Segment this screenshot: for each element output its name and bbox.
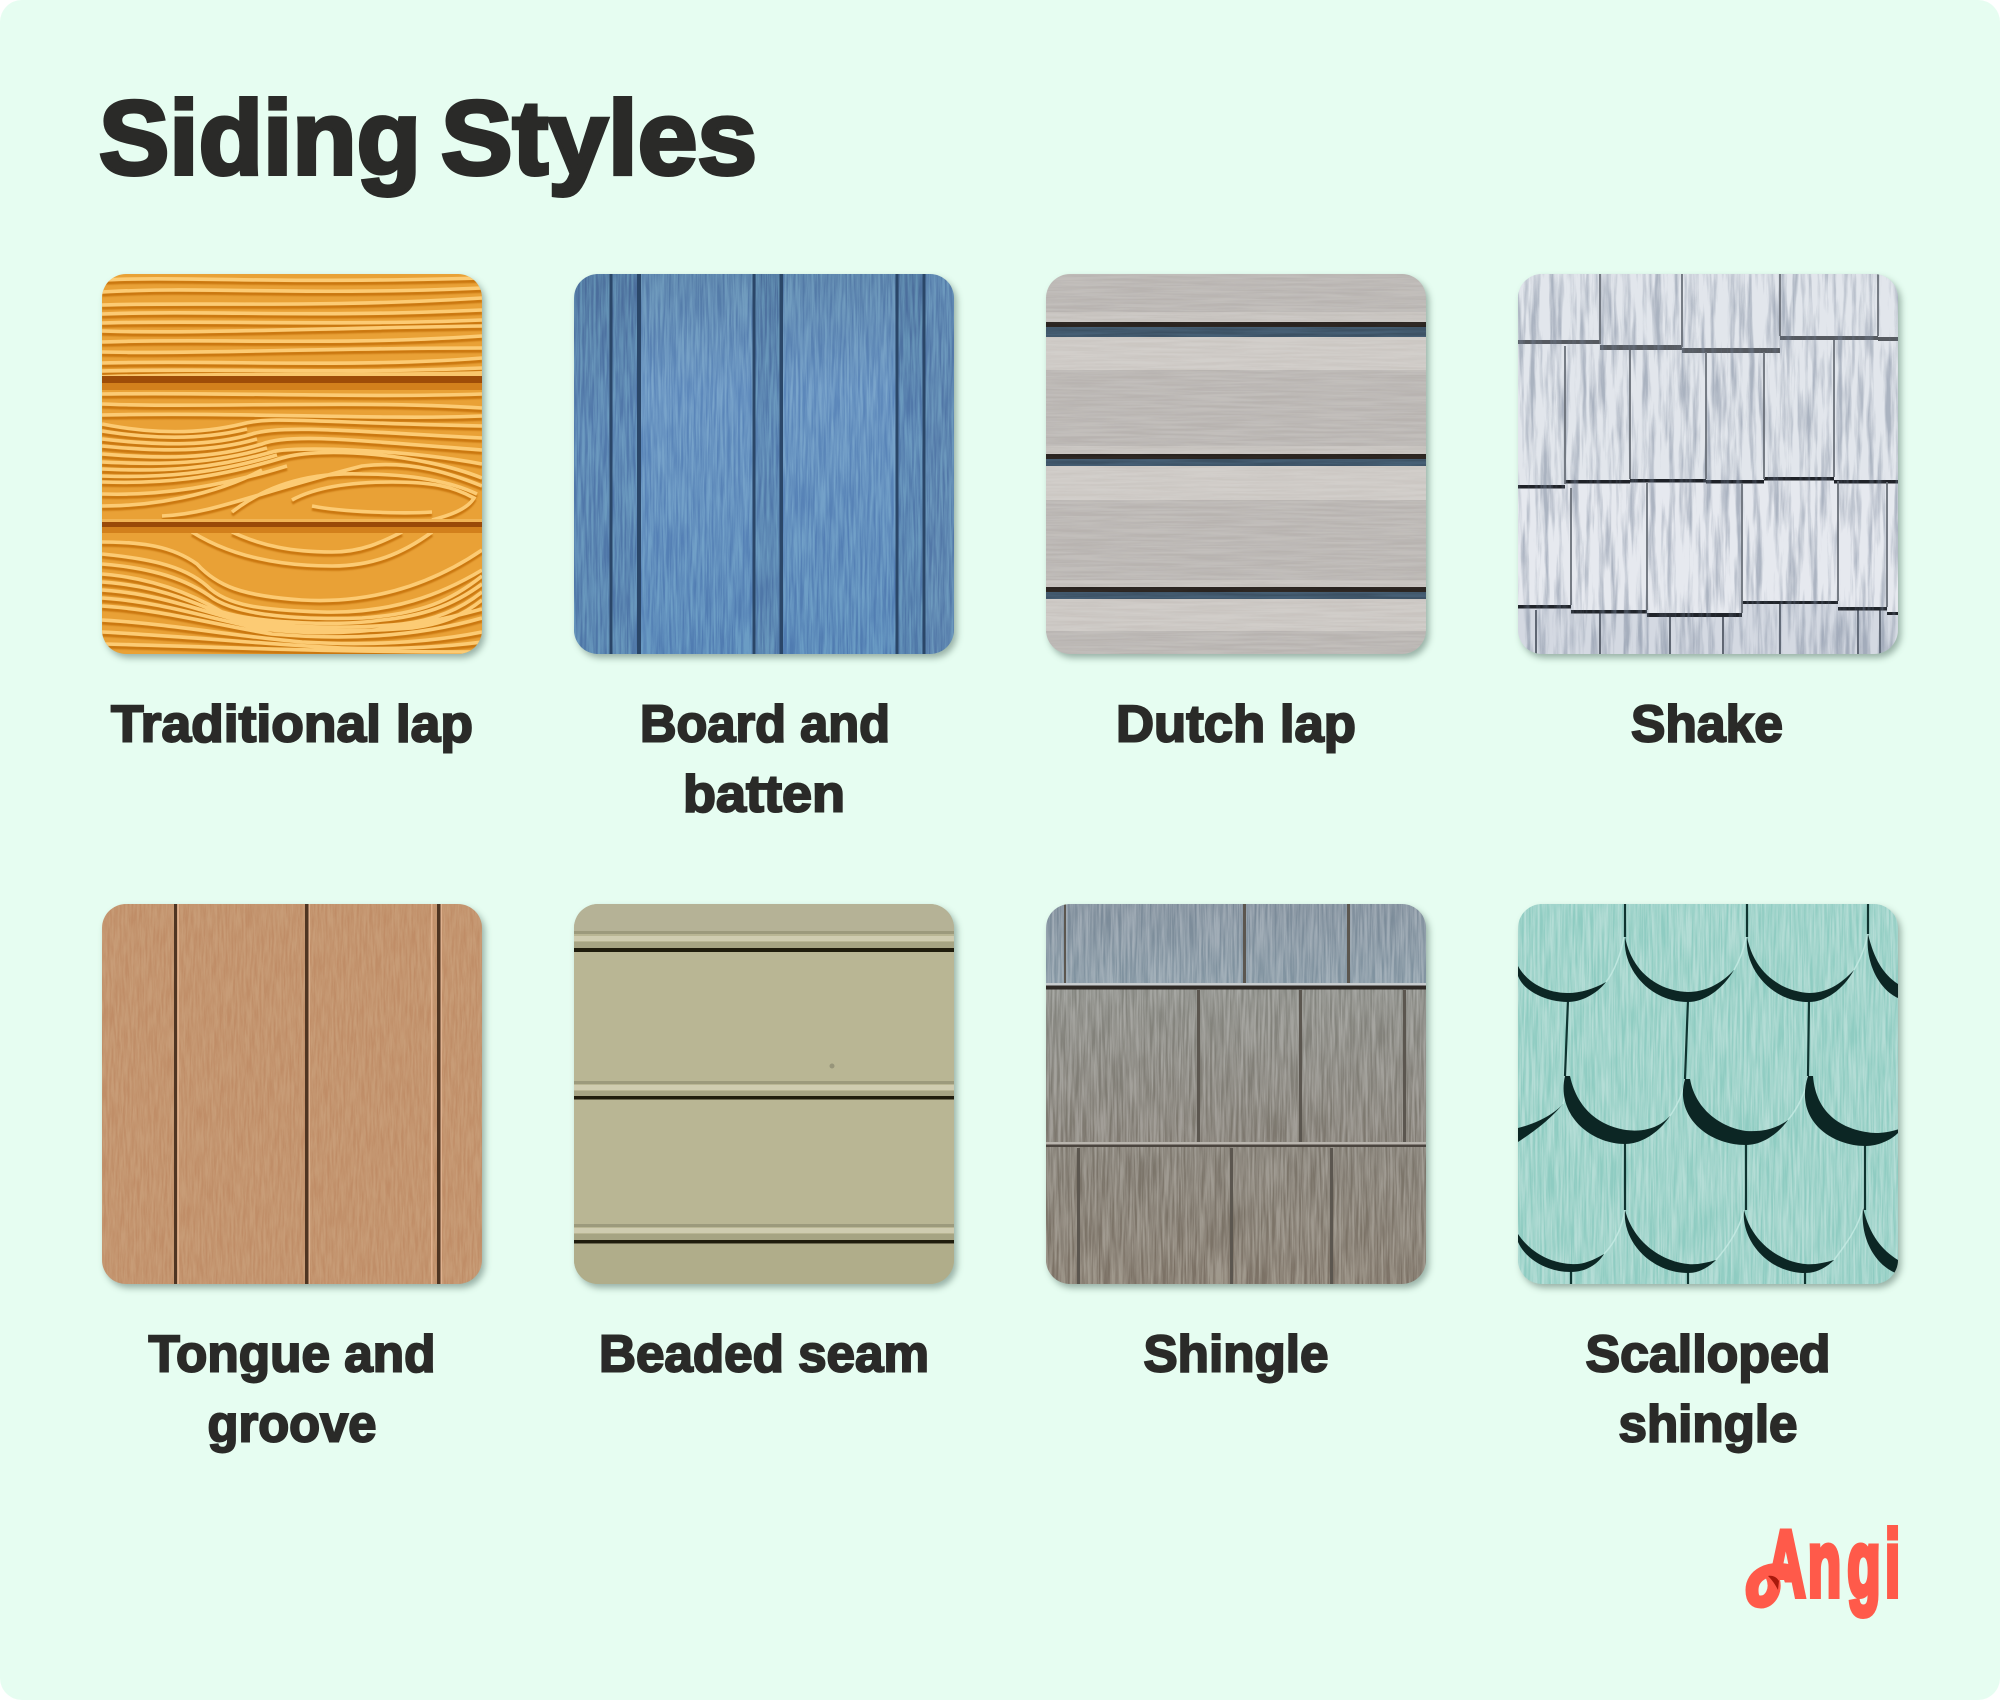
label: shingle: [1618, 1396, 1798, 1454]
image: gray dutch lap: [1046, 274, 1426, 654]
image: gray shingle: [1046, 904, 1426, 1284]
image: tan tongue and groove: [102, 904, 482, 1284]
image: olive beaded seam: [574, 904, 954, 1284]
label: [640, 696, 890, 824]
label: Board and: [640, 696, 890, 754]
label: Shingle: [1144, 1326, 1328, 1384]
image: blue board and batten: [574, 274, 954, 654]
label: groove: [208, 1396, 376, 1454]
panel: shake: [1518, 274, 1898, 754]
panel: board and batten: [574, 274, 954, 824]
label: Dutch lap: [1116, 696, 1356, 754]
label: Beaded seam: [599, 1326, 929, 1384]
label: Shake: [1631, 696, 1783, 754]
panel: beaded seam: [574, 904, 954, 1384]
title: Styles: [441, 80, 757, 197]
panel: dutch lap: [1046, 274, 1426, 754]
panel: shingle: [1046, 904, 1426, 1384]
panel: tongue and groove: [102, 904, 482, 1454]
panel: traditional lap: [102, 274, 482, 754]
label: [148, 1326, 436, 1454]
label: Scalloped: [1586, 1326, 1830, 1384]
image: traditional lap wood grain: [102, 274, 482, 654]
logo: Angi: Angi: [1766, 1512, 1900, 1617]
title: [99, 80, 757, 197]
label: Traditional lap: [111, 696, 473, 754]
label: batten: [683, 766, 845, 824]
title: Siding: [99, 80, 421, 197]
image: white weathered shake: [1518, 274, 1898, 654]
panel: scalloped shingle: [1518, 904, 1902, 1454]
label: [1586, 1326, 1830, 1454]
label: Tongue and: [148, 1326, 436, 1384]
image: teal scalloped shingle: [1518, 904, 1902, 1284]
